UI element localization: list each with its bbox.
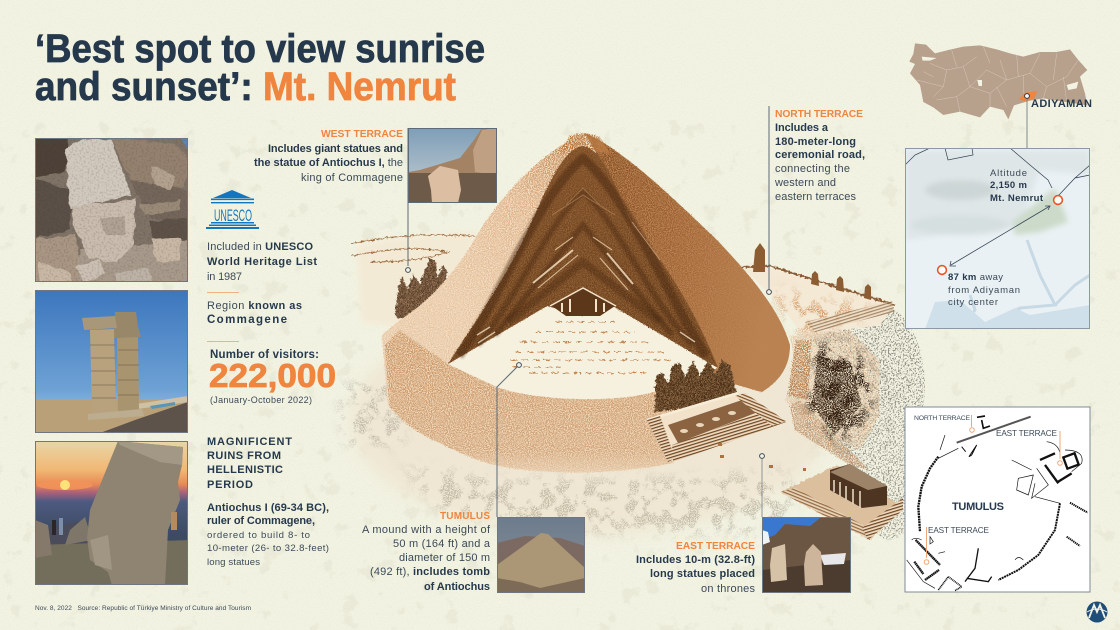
text: magnificent ruins: PERIOD	[207, 479, 253, 491]
callout: east terrace: EAST TERRACE	[676, 541, 755, 552]
text: magnificent ruins: 10-meter (26- to 32.8-feet)	[207, 543, 329, 554]
number of visitors	[209, 349, 336, 405]
leader: west terrace	[406, 128, 410, 272]
leader: east terrace	[760, 454, 764, 517]
chevrons	[459, 158, 706, 356]
text: UNESCO listing: World Heritage List	[207, 256, 317, 268]
tumulus wall	[385, 330, 720, 472]
stone wall to temple	[790, 400, 870, 470]
text: region	[207, 300, 302, 326]
distance text	[948, 272, 1020, 308]
ground wash under illustration	[338, 305, 830, 535]
map: Mt. Nemrut location	[905, 148, 1090, 329]
left sand slope	[382, 133, 585, 420]
number of visitors: Number of visitors:	[210, 349, 319, 361]
altitude text: 2,150 m	[990, 180, 1027, 191]
west terrace statues	[395, 258, 448, 322]
marker: Adiyaman	[938, 266, 946, 274]
altitude text: Altitude	[990, 168, 1027, 179]
callout: east terrace: long statues placed	[650, 568, 755, 580]
marker: Mt. Nemrut	[1054, 196, 1062, 204]
pale inner floor	[448, 306, 718, 399]
callout: west terrace: the statue of Antiochus I, the	[254, 157, 403, 169]
plan labels	[914, 415, 1058, 535]
altitude text: Mt. Nemrut	[990, 193, 1044, 204]
icon: UNESCO logo	[206, 190, 259, 229]
callout: east terrace: Includes 10-m (32.8-ft)	[636, 554, 755, 566]
distance arrow	[950, 206, 1050, 266]
dark tent section	[448, 146, 718, 368]
photo: west terrace	[408, 128, 497, 203]
text: magnificent ruins: ruler of Commagene,	[207, 515, 315, 527]
map: Türkiye locator	[909, 43, 1092, 148]
dark scrub on hillside	[785, 330, 880, 450]
callout: north terrace: 180-meter-long	[775, 136, 856, 148]
callout: tumulus: (492 ft), includes tomb	[370, 566, 490, 578]
callout: west terrace: WEST TERRACE	[321, 129, 403, 140]
distance text: city center	[948, 297, 998, 308]
callout: west terrace: Includes giant statues and	[268, 143, 403, 155]
callout: tumulus: 50 m (164 ft) and a	[393, 538, 491, 550]
site plan map	[905, 407, 1090, 592]
callout: west terrace	[254, 129, 403, 184]
east terrace platform	[647, 393, 786, 462]
text: magnificent ruins: HELLENISTIC	[207, 464, 283, 476]
west terrace	[352, 232, 478, 330]
callout: tumulus: A mound with a height of	[362, 524, 491, 536]
temple platform	[780, 464, 903, 540]
east terrace statues	[655, 360, 737, 412]
plan pointers	[924, 415, 1062, 564]
callout: north terrace	[774, 109, 865, 203]
text: magnificent ruins: RUINS FROM	[207, 450, 281, 462]
Adiyaman province	[1019, 91, 1037, 101]
title: and sunset’: Mt. Nemrut	[35, 65, 456, 109]
illustration: Mt. Nemrut tumulus	[338, 133, 925, 540]
Adiyaman label: ADIYAMAN	[1031, 98, 1092, 110]
title: ‘Best spot to view sunrise	[35, 27, 485, 71]
title	[35, 27, 485, 109]
summit cap	[556, 133, 612, 155]
right slope	[585, 133, 790, 392]
text: magnificent ruins: long statues	[207, 557, 260, 568]
text: UNESCO listing: Included in UNESCO	[207, 241, 313, 253]
photo: colossal stone head	[35, 138, 188, 282]
text: region: Commagene	[207, 314, 287, 326]
plan labels: EAST TERRACE	[996, 429, 1058, 438]
number of visitors: 222,000	[209, 357, 336, 394]
callout: north terrace: eastern terraces	[775, 191, 856, 203]
text: region: Region known as	[207, 300, 302, 312]
icon: AA logo	[1086, 602, 1108, 622]
distance text: from Adiyaman	[948, 285, 1020, 296]
text: magnificent ruins: Antiochus I (69-34 BC),	[207, 502, 329, 514]
callout: east terrace	[636, 541, 756, 595]
temple building	[830, 464, 887, 508]
pale floor markings	[510, 322, 672, 373]
callout: north terrace: western and	[774, 177, 836, 189]
callout: west terrace: king of Commagene	[301, 172, 403, 184]
number of visitors: (January-October 2022)	[210, 395, 312, 405]
callout: north terrace: connecting the	[775, 163, 850, 175]
plan labels: EAST TERRACE	[928, 526, 990, 535]
photo: stone head at sunset	[35, 441, 190, 585]
callout: north terrace: ceremonial road,	[775, 149, 865, 161]
plan drawing	[907, 416, 1088, 591]
text: magnificent ruins: MAGNIFICENT	[207, 436, 292, 448]
text: UNESCO listing	[207, 241, 317, 283]
plan labels: NORTH TERRACE	[914, 415, 970, 422]
leader: tumulus	[497, 363, 521, 517]
text: magnificent ruins	[207, 436, 329, 568]
scattered stones	[718, 443, 806, 471]
leader: north terrace	[767, 106, 771, 294]
altitude text	[990, 168, 1044, 204]
source note: Nov. 8, 2022 Source: Republic of Türkiye Ministry of Culture and Tourism	[35, 605, 251, 612]
photo: east terrace	[762, 517, 851, 593]
photo: tumulus	[497, 517, 585, 593]
callout: tumulus	[362, 511, 491, 593]
text: magnificent ruins: ordered to build 8- to	[207, 530, 310, 541]
callout: tumulus: of Antiochus	[424, 581, 490, 593]
north terrace	[742, 243, 895, 335]
callout: north terrace: Includes a	[775, 122, 829, 134]
north terrace statues	[753, 243, 871, 300]
photo: columns at Karakus	[35, 290, 188, 433]
text: UNESCO listing: in 1987	[207, 271, 242, 283]
callout: east terrace: on thrones	[701, 583, 756, 595]
inner temple facade	[550, 287, 616, 316]
distance text: 87 km away	[948, 272, 1003, 283]
plan labels: TUMULUS	[952, 501, 1004, 513]
callout: tumulus: TUMULUS	[440, 511, 490, 522]
icon: UNESCO logo: UNESCO	[214, 206, 252, 225]
callout: tumulus: diameter of 150 m	[399, 552, 490, 564]
gray scrub scatter at right	[815, 300, 925, 540]
callout: north terrace: NORTH TERRACE	[775, 109, 863, 120]
